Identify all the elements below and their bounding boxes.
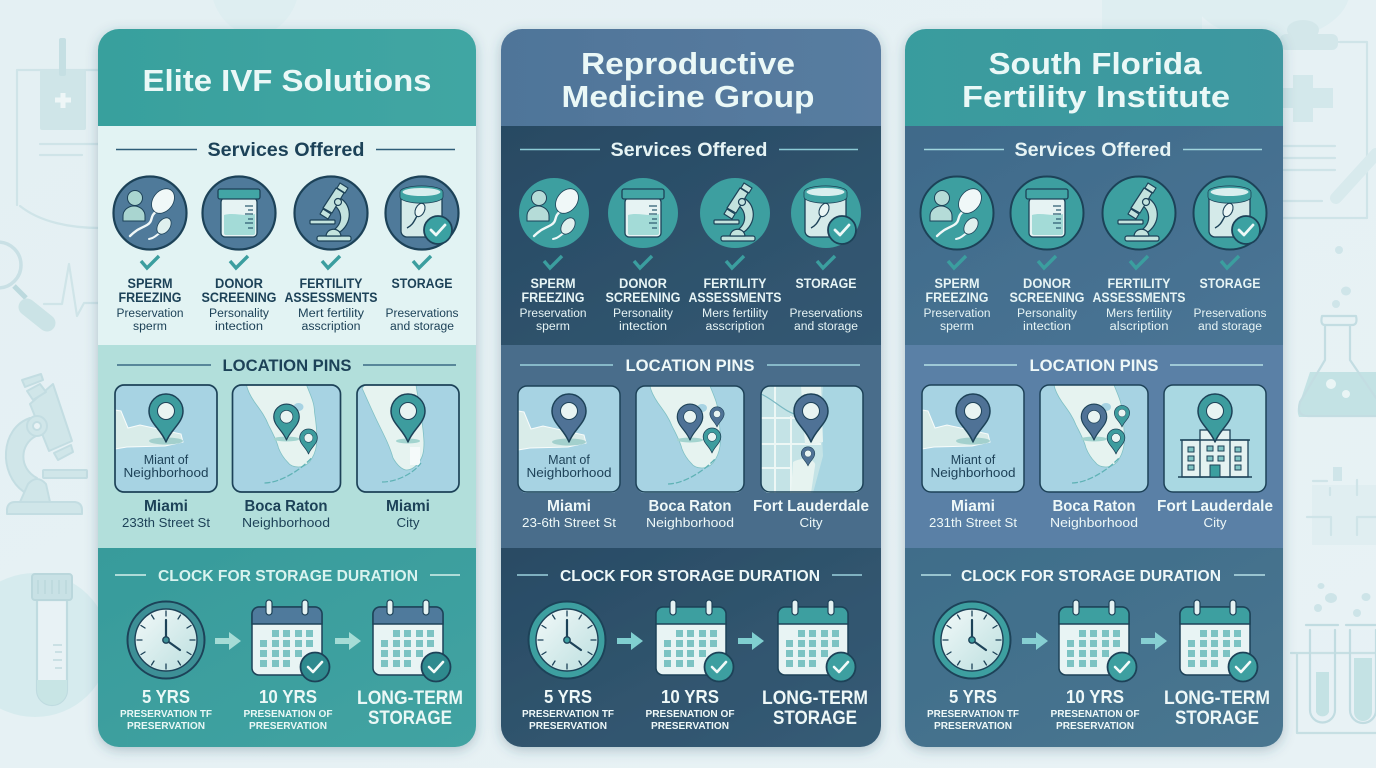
duration labels: PRESERVATION [529,720,607,732]
duration labels: PRESERVATION TF [522,708,615,720]
icon: calendar long-term [778,600,856,682]
service: fertility assessments: ASSESSMENTS [284,290,378,305]
service: donor screening [1010,176,1084,333]
location labels: City [800,515,823,530]
heading: Elite IVF Solutions: Elite IVF Solutions [142,63,432,98]
section: storage duration [115,568,463,732]
service: fertility assessments: FERTILITY [704,276,766,291]
duration labels: STORAGE [1175,708,1259,729]
service: storage: and storage [390,321,454,333]
location labels: Miami [144,498,188,515]
duration labels: 5 YRS [142,686,190,707]
service: sperm freezing: SPERM [128,276,172,291]
location labels: Fort Lauderdale [1157,498,1273,515]
duration labels: PRESERVATION [249,720,327,732]
background icon: clipboard and dropper [1278,20,1376,218]
service: donor screening: intection [215,321,263,333]
duration labels: 5 YRS [544,686,592,707]
icon: clock [128,602,204,678]
service: donor screening: SCREENING [1010,290,1084,305]
icon: clock [528,602,606,678]
location labels: 231th Street St [929,515,1017,530]
service: fertility assessments: FERTILITY [1108,276,1170,291]
service: fertility assessments: alscription [1110,321,1168,333]
location labels: Neighborhood [646,515,734,530]
location labels [522,498,869,530]
duration labels: STORAGE [773,708,857,729]
duration labels: PRESENATION OF [1050,708,1140,720]
background icon: magnifier and heartbeat [0,242,100,323]
background icon: microscope [6,374,87,514]
service: donor screening [606,178,680,333]
service: sperm freezing: sperm [536,321,570,333]
location labels: Boca Raton [244,498,328,515]
map: Miami: Miant of [144,453,189,467]
section: services offered [920,139,1267,333]
duration labels: 10 YRS [259,686,317,707]
icon: clock [934,602,1010,678]
duration labels [522,686,868,732]
service: sperm freezing: Preservation [924,308,990,320]
services heading: Services Offered [208,139,364,161]
service: donor screening: DONOR [619,276,667,291]
icon: calendar 10 years [656,600,734,682]
map: Boca Raton [1040,385,1148,492]
duration labels: STORAGE [368,708,452,729]
location labels: Boca Raton [1052,498,1136,515]
service: storage: STORAGE [796,276,856,291]
service: sperm freezing: Preservation [116,308,184,320]
icon: calendar long-term [373,600,450,682]
service: fertility assessments: Mers fertility [702,308,768,320]
service: fertility assessments: FERTILITY [300,276,362,291]
service: storage: and storage [1198,321,1262,333]
heading: Reproductive Medicine Group [562,46,814,114]
service: sperm freezing: Preservation [520,308,586,320]
heading: South Florida Fertility Institute [962,46,1230,114]
duration labels: PRESERVATION TF [927,708,1020,720]
service: sperm freezing: FREEZING [118,290,182,305]
location labels: Miami [951,498,995,515]
panel: Reproductive Medicine Group [501,29,881,747]
section: location pins [115,356,459,530]
services heading: Services Offered [610,139,768,161]
service: storage: Preservations [386,308,459,320]
section: services offered [114,139,459,333]
service: sperm freezing [519,178,589,333]
duration labels: PRESENATION OF [244,708,333,720]
service: sperm freezing: FREEZING [522,290,584,305]
map: Fort Lauderdale building [1164,385,1266,492]
service: fertility assessments: ASSESSMENTS [688,290,782,305]
arrow [617,632,643,650]
service: fertility assessments: asscription [302,321,360,333]
service: fertility assessments: asscription [706,321,764,333]
service: fertility assessments: ASSESSMENTS [1092,290,1186,305]
panel: South Florida Fertility Institute [905,29,1283,747]
background icon: flask with bubbles [1298,246,1376,417]
service: sperm freezing: SPERM [530,276,576,291]
location labels: 23-6th Street St [522,515,616,530]
heading: South Florida Fertility Institute: South Florida [988,46,1202,81]
services heading: Services Offered [1014,139,1172,161]
service: sperm freezing: FREEZING [926,290,988,305]
service: storage: STORAGE [392,276,452,291]
location heading: LOCATION PINS [626,356,754,375]
service: donor screening: Personality [613,308,673,320]
background icon: cross outline [1307,467,1376,545]
service: sperm freezing: sperm [133,321,167,333]
duration labels [927,686,1270,732]
location labels: Neighborhood [242,515,330,530]
duration labels: PRESERVATION [934,720,1012,732]
section: location pins [922,356,1273,530]
service: donor screening [202,176,276,333]
map: Miami [922,385,1024,492]
map: Miami: Neighborhood [124,466,209,480]
map: Miami city [357,385,459,492]
location heading: LOCATION PINS [222,356,352,375]
map: Fort Lauderdale [761,386,863,493]
location labels: Miami [547,498,591,515]
map: Miami: Miant of [951,453,996,467]
duration labels: LONG-TERM [762,688,868,709]
arrow [1022,632,1048,650]
map: Miami [115,385,217,492]
service: storage: Preservations [1194,308,1267,320]
location labels: Miami [386,498,430,515]
service: donor screening: DONOR [215,276,263,291]
service: fertility assessments [1092,176,1186,333]
map: Boca Raton [232,385,340,492]
map: Miami: Neighborhood [526,466,612,480]
panel: Elite IVF Solutions [98,29,476,747]
location labels: 233th Street St [122,515,210,530]
location labels [122,498,430,530]
heading: South Florida Fertility Institute: Fertility Institute [962,79,1230,114]
service: fertility assessments: Mers fertility [1106,308,1172,320]
location labels: City [1204,515,1227,530]
service: storage [790,178,863,333]
service: storage: and storage [794,321,858,333]
location labels: Fort Lauderdale [753,498,869,515]
service: donor screening: intection [619,321,667,333]
arrow [335,632,361,650]
service: donor screening: DONOR [1023,276,1071,291]
arrow [215,632,241,650]
map: Miami [518,386,620,493]
background icon: clipboard with cross [17,38,100,228]
duration labels: PRESERVATION [1056,720,1134,732]
icon: calendar long-term [1180,600,1258,682]
icon: calendar 10 years [252,600,330,682]
location heading: LOCATION PINS [1030,356,1158,375]
service: storage: STORAGE [1200,276,1260,291]
map: Miami: Neighborhood [930,466,1016,480]
heading: Reproductive Medicine Group: Medicine Group [562,79,814,114]
duration labels: LONG-TERM [357,688,463,709]
service: sperm freezing [920,176,994,333]
section: storage duration [517,568,868,732]
service: donor screening: SCREENING [202,290,276,305]
background blobs [210,0,1350,40]
duration labels: PRESENATION OF [646,708,735,720]
section: storage duration [921,568,1270,732]
clock heading: CLOCK FOR STORAGE DURATION [961,568,1221,585]
location labels: Neighborhood [1050,515,1138,530]
section: location pins [518,356,869,530]
service: donor screening: intection [1023,321,1071,333]
arrow [738,632,764,650]
location labels: City [396,515,420,530]
service: fertility assessments [284,176,378,333]
background icon: test tube [0,573,109,717]
location labels: Boca Raton [648,498,732,515]
service: sperm freezing: sperm [940,321,974,333]
duration labels [120,686,463,732]
section: services offered [519,139,863,333]
service: storage [1194,176,1267,333]
duration labels: 5 YRS [949,686,997,707]
service: sperm freezing: SPERM [934,276,980,291]
duration labels: PRESERVATION [127,720,205,732]
heading: Reproductive Medicine Group: Reproductive [581,46,795,81]
duration labels: PRESERVATION [651,720,729,732]
location labels [929,498,1273,530]
service: storage [386,176,459,333]
service: sperm freezing [114,176,186,333]
duration labels: 10 YRS [1066,686,1124,707]
map: Boca Raton [636,386,744,493]
service: donor screening: SCREENING [606,290,680,305]
icon: calendar 10 years [1059,600,1136,682]
clock heading: CLOCK FOR STORAGE DURATION [560,568,820,585]
service: fertility assessments [688,178,782,333]
duration labels: PRESERVATION TF [120,708,213,720]
service: fertility assessments: Mert fertility [298,308,364,320]
map: Miami: Mant of [548,453,590,467]
service: storage: Preservations [790,308,863,320]
service: donor screening: Personality [1017,308,1077,320]
duration labels: 10 YRS [661,686,719,707]
background icon: test tubes [1291,583,1376,733]
clock heading: CLOCK FOR STORAGE DURATION [158,568,418,585]
duration labels: LONG-TERM [1164,688,1270,709]
arrow [1141,632,1167,650]
service: donor screening: Personality [209,308,269,320]
